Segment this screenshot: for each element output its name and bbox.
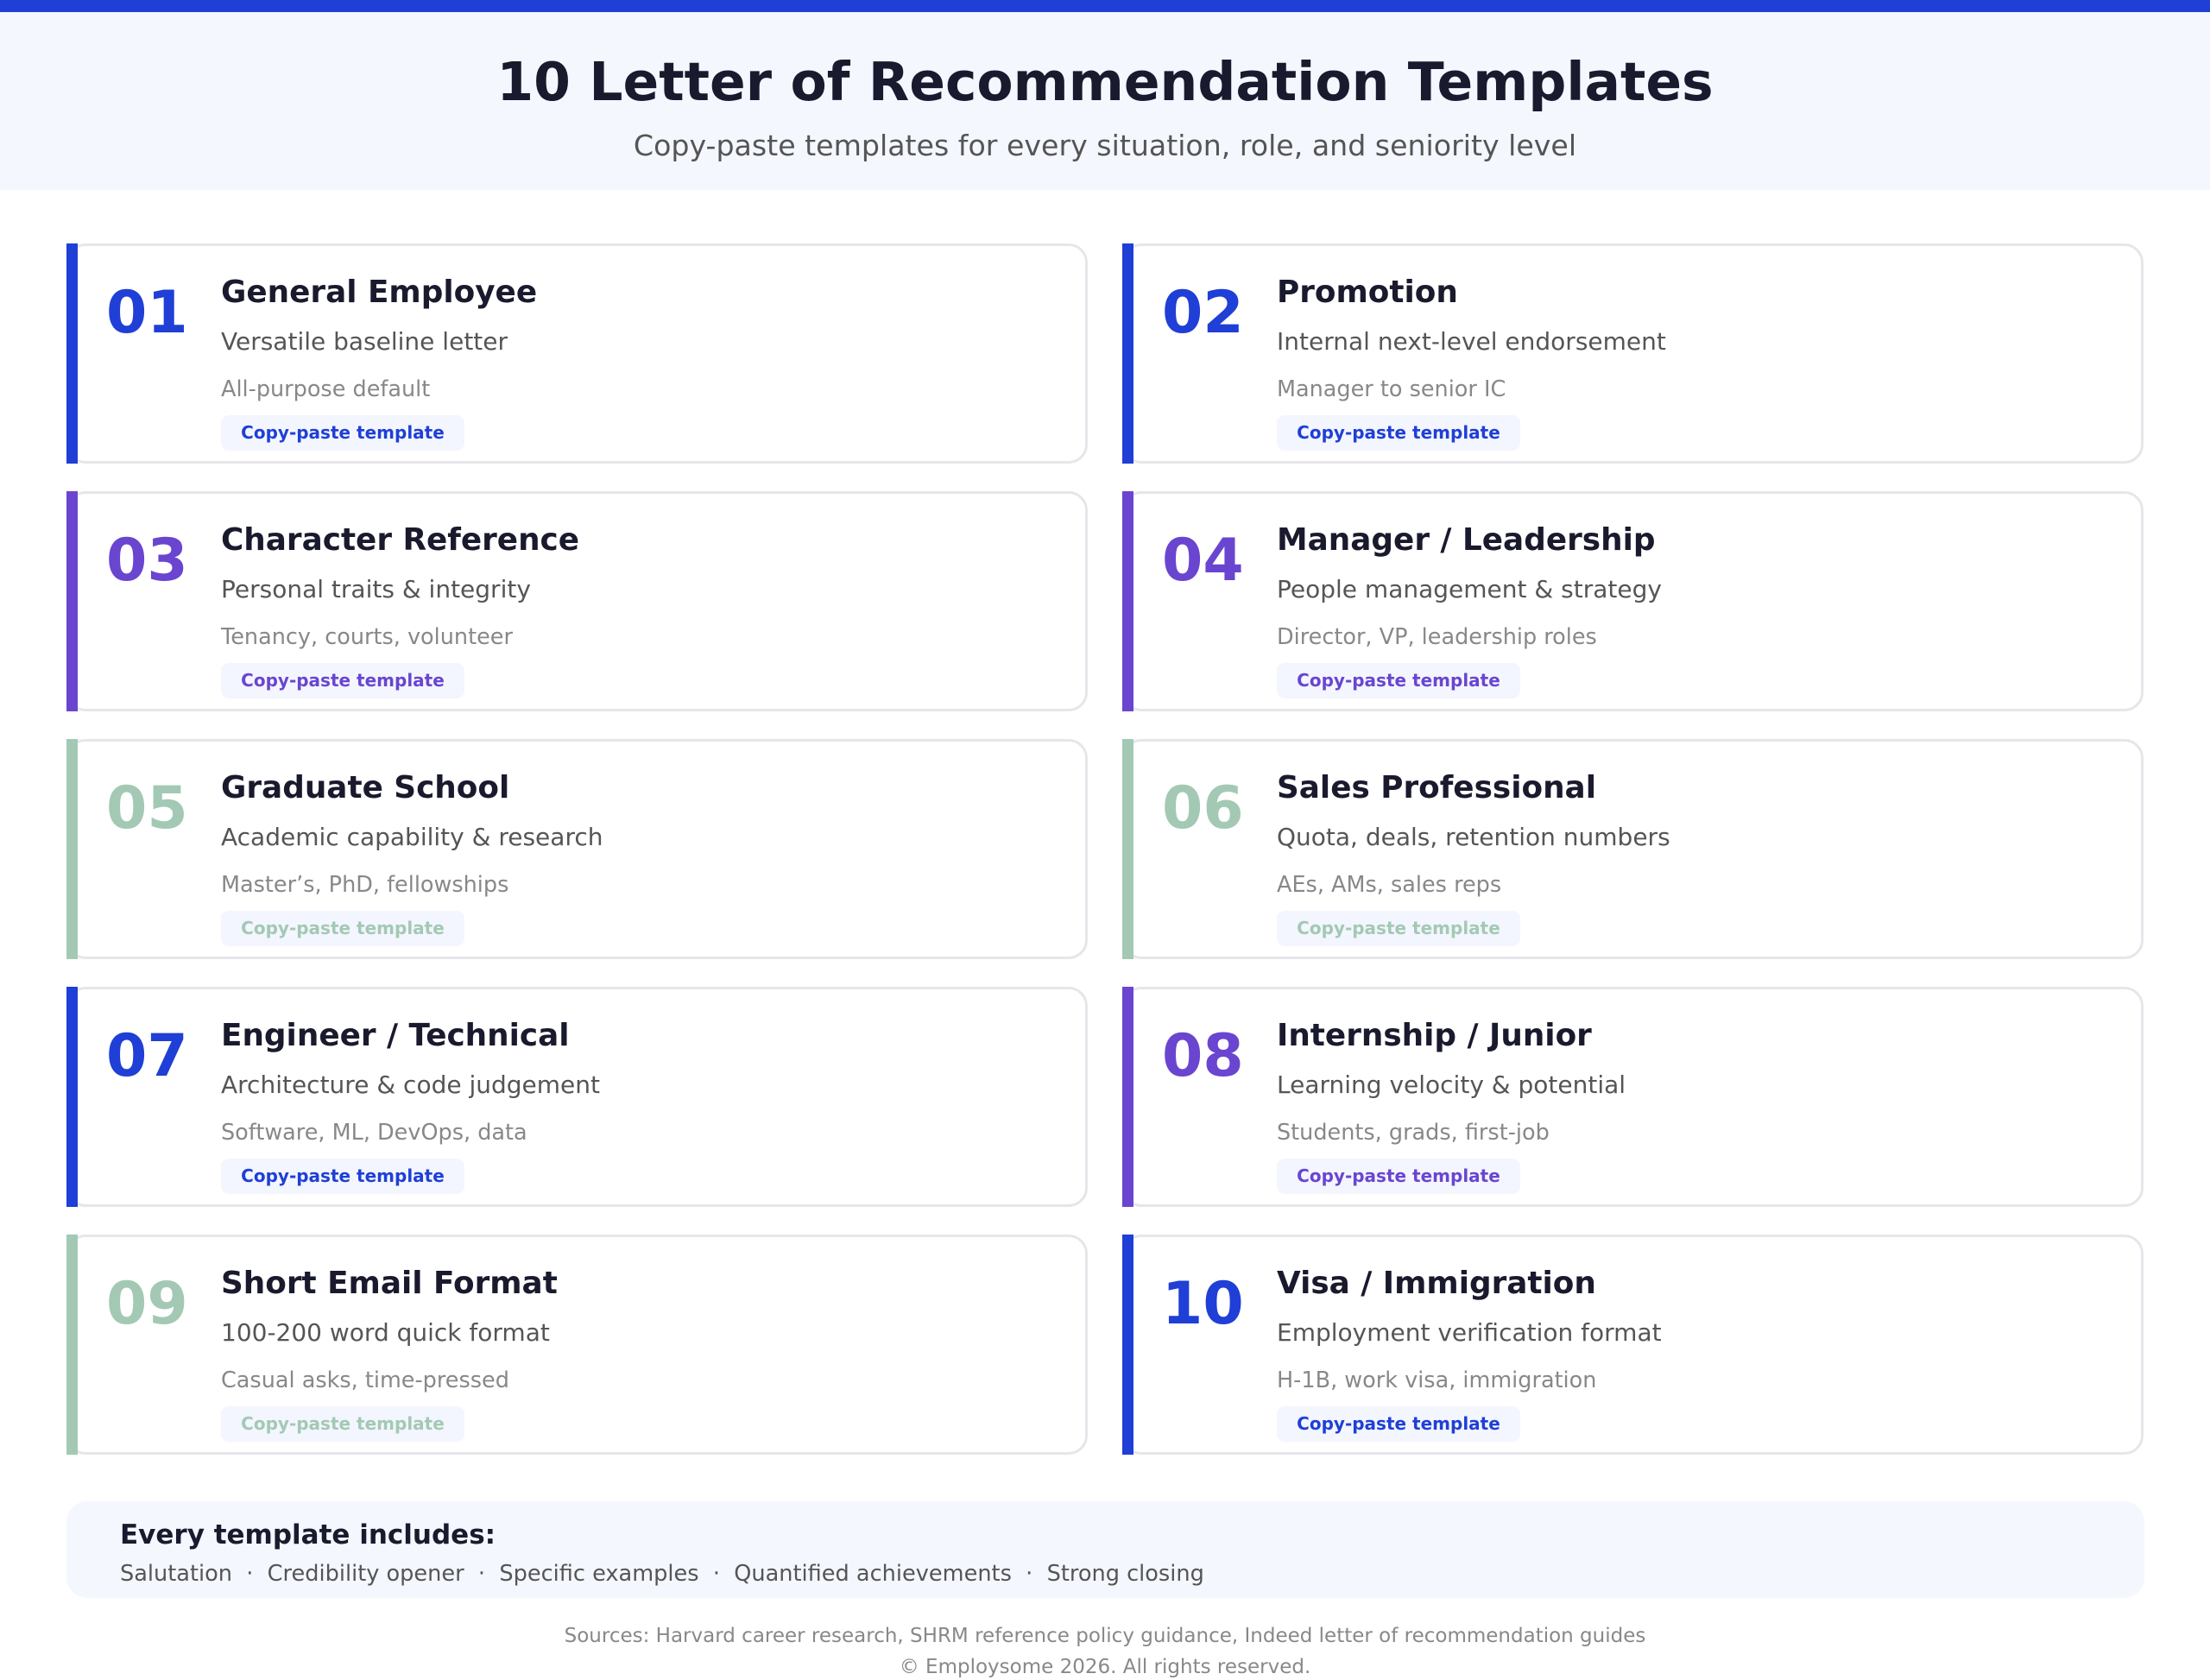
card 08: Copy-paste template (1297, 1165, 1500, 1186)
card 04: Copy-paste template (1297, 670, 1500, 691)
footer box: every template includes: Salutation · Credibility opener · Specific examples · Quantified achievements · Strong closing (120, 1561, 1204, 1587)
card 08: Learning velocity & potential (1277, 1071, 1626, 1099)
card 03: Copy-paste template (241, 670, 445, 691)
card 06: AEs, AMs, sales reps (1277, 872, 1501, 898)
card 09: 100-200 word quick format (221, 1318, 550, 1347)
card 01: General Employee (221, 275, 537, 310)
card 06: Sales Professional (1277, 770, 1596, 805)
card 10: Copy-paste template (1297, 1413, 1500, 1434)
card 10: H-1B, work visa, immigration (1277, 1367, 1596, 1393)
card 03: Tenancy, courts, volunteer (221, 624, 513, 650)
card 05: 05 (106, 774, 188, 843)
card 09: 09 (106, 1270, 188, 1338)
card 10: 10 (1162, 1270, 1244, 1338)
card 05: Graduate School (221, 770, 509, 805)
card 08 (1122, 987, 2144, 1207)
card 01: Copy-paste template (241, 422, 445, 443)
card 04: People management & strategy (1277, 575, 1662, 603)
card 04: 04 (1162, 527, 1244, 595)
card 02: 02 (1162, 279, 1244, 347)
card 01: 01 (106, 279, 188, 347)
card 02 (1122, 243, 2144, 464)
card 06: Quota, deals, retention numbers (1277, 823, 1670, 851)
card 09: Short Email Format (221, 1266, 558, 1301)
card 10 (1122, 1235, 2144, 1455)
card 06: 06 (1162, 774, 1244, 843)
card 03: 03 (106, 527, 188, 595)
header band (0, 12, 2210, 190)
card 03: Personal traits & integrity (221, 575, 531, 603)
card 04: Director, VP, leadership roles (1277, 624, 1597, 650)
card 04: Manager / Leadership (1277, 522, 1655, 558)
card 05 (66, 739, 1088, 959)
card 07: Engineer / Technical (221, 1018, 570, 1053)
card 09: Copy-paste template (241, 1413, 445, 1434)
card 07: 07 (106, 1022, 188, 1090)
card 06 (1122, 739, 2144, 959)
footer box: every template includes: Every template includes: (120, 1519, 496, 1551)
card 09: Casual asks, time-pressed (221, 1367, 509, 1393)
title: 10 Letter of Recommendation Templates (496, 51, 1714, 113)
card 04 (1122, 491, 2144, 711)
card 02: Manager to senior IC (1277, 376, 1506, 402)
card 05: Copy-paste template (241, 918, 445, 938)
card 01: Versatile baseline letter (221, 327, 508, 356)
card 07 (66, 987, 1088, 1207)
card 08: Students, grads, first-job (1277, 1120, 1550, 1146)
card 05: Master’s, PhD, fellowships (221, 872, 508, 898)
subtitle: Copy-paste templates for every situation, role, and seniority level (634, 129, 1576, 162)
card 03 (66, 491, 1088, 711)
card 02: Promotion (1277, 275, 1458, 310)
card 08: Internship / Junior (1277, 1018, 1592, 1053)
card 01: All-purpose default (221, 376, 430, 402)
card 10: Visa / Immigration (1277, 1266, 1596, 1301)
card 09 (66, 1235, 1088, 1455)
card 03: Character Reference (221, 522, 579, 558)
card 07: Architecture & code judgement (221, 1071, 600, 1099)
card 02: Copy-paste template (1297, 422, 1500, 443)
card 07: Copy-paste template (241, 1165, 445, 1186)
sources: Sources: Harvard career research, SHRM reference policy guidance, Indeed letter of recommendation guides (565, 1625, 1645, 1647)
card 01 (66, 243, 1088, 464)
card 07: Software, ML, DevOps, data (221, 1120, 527, 1146)
card 02: Internal next-level endorsement (1277, 327, 1666, 356)
card 05: Academic capability & research (221, 823, 603, 851)
card 06: Copy-paste template (1297, 918, 1500, 938)
card 10: Employment verification format (1277, 1318, 1662, 1347)
footer box: every template includes (66, 1501, 2144, 1598)
copyright: © Employsome 2026. All rights reserved. (900, 1656, 1310, 1678)
card 08: 08 (1162, 1022, 1244, 1090)
